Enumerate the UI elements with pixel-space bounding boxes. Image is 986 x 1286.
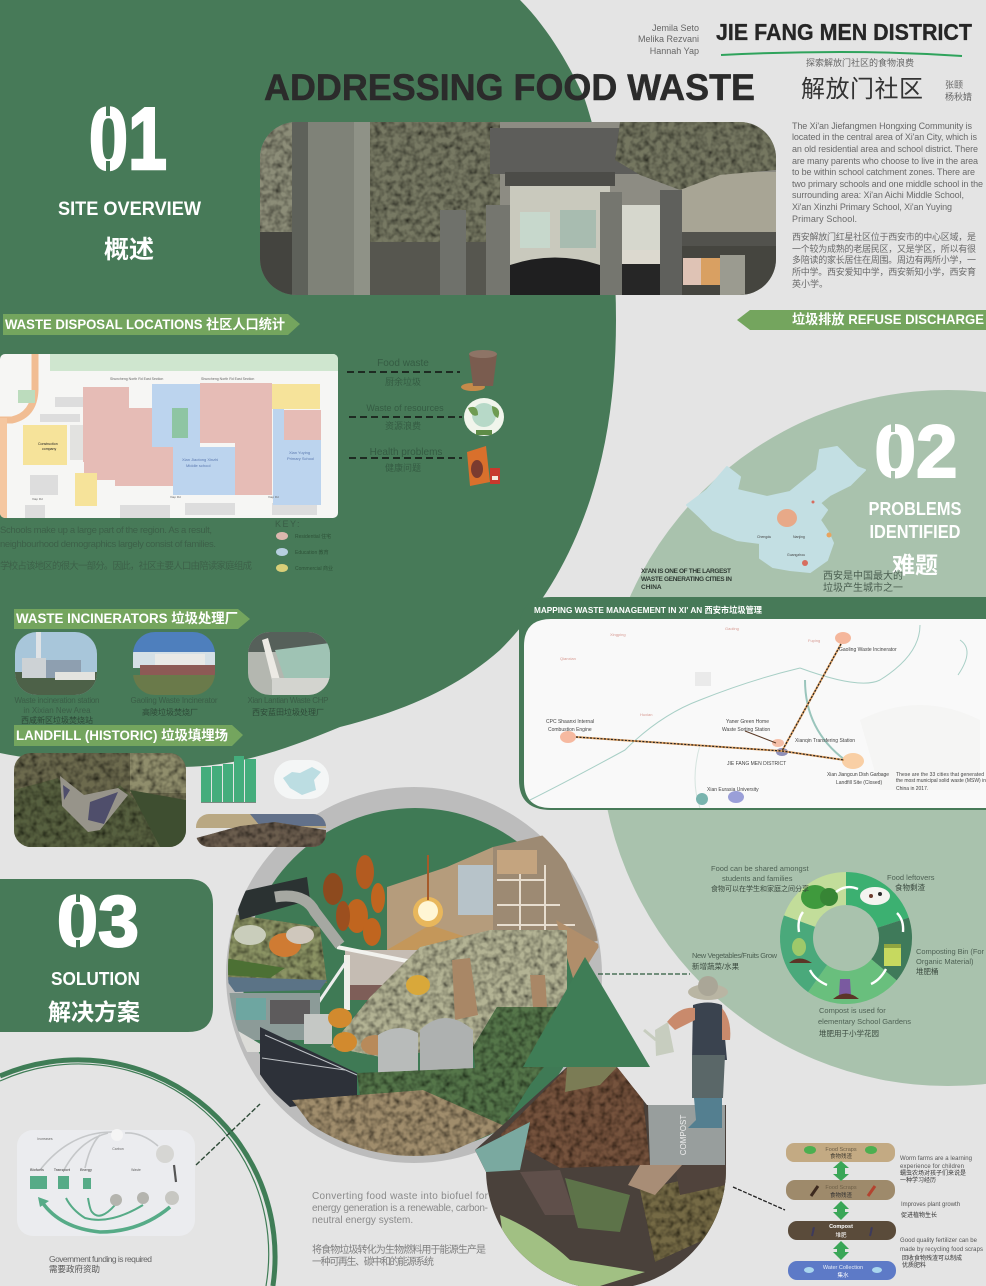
barrel: [628, 1105, 725, 1195]
panel: carbon cycle diagram: [17, 1129, 195, 1236]
map key: [275, 519, 333, 572]
section 02 heading: 02: [874, 410, 958, 493]
map: neighbourhood land use: Xiap Rd: [32, 497, 43, 501]
text: government funding: Government funding is required: [49, 1254, 152, 1264]
text: xi'an largest chinese: 西安是中国最大的: [823, 569, 903, 582]
bar: food scraps 1: Food Scraps: [825, 1147, 857, 1153]
chart: waste bars: [201, 756, 256, 803]
ring: bottom left: [0, 1060, 275, 1286]
triangle: [523, 957, 650, 1067]
text: biofuel english: [312, 1191, 489, 1226]
green underline: [721, 52, 962, 56]
map labels: Combustion Engine: [548, 727, 592, 733]
text: xi'an largest english: XI'AN IS ONE OF THE LARGEST: [641, 568, 731, 575]
banner: refuse discharge: 垃圾排放 REFUSE DISCHARGE: [792, 311, 984, 327]
machinery: [228, 993, 320, 1040]
plant building: [493, 836, 598, 942]
panel: carbon cycle diagram: Transport: [54, 1168, 71, 1172]
double arrows: [833, 1161, 849, 1260]
map: neighbourhood land use: Xian Jiaotong Xinzhi: [182, 457, 218, 462]
bright bulb: [413, 897, 443, 927]
map labels: These are the 33 cities that generated: [896, 772, 984, 778]
chinese district name: 解放门社区: [801, 76, 923, 103]
paragraph: chinese site description: 英小学。: [792, 278, 828, 289]
barrel: COMPOST: [679, 1115, 688, 1155]
pump nozzle: [235, 877, 310, 920]
main title: ADDRESSING FOOD WASTE: [264, 67, 755, 108]
cycle labels: 食物可以在学生和家庭之间分享: [711, 884, 809, 893]
authors: [638, 23, 699, 56]
worm farm notes: [900, 1156, 983, 1269]
food bowl: [224, 913, 327, 983]
map labels: Xian Jiangcun Dish Garbage: [827, 772, 889, 778]
city map: [524, 619, 986, 808]
label: health problems: [370, 447, 442, 473]
cycle icons: [801, 885, 829, 909]
city map: Gaoling: [725, 626, 739, 631]
panel: carbon cycle diagram: Biofuels: [30, 1168, 44, 1172]
paragraph: english site description: Primary School.: [792, 214, 857, 224]
captions: incinerators: Xian Lantian Waste CHP: [248, 696, 328, 705]
bar: compost: Compost: [829, 1224, 853, 1230]
map labels: Waste Sorting Station: [722, 727, 770, 733]
captions: incinerators: [14, 696, 328, 725]
banner: waste incinerators: WASTE INCINERATORS 垃圾处理厂: [16, 610, 238, 626]
worm farm notes: 蠕虫农场对孩子们来说是: [900, 1169, 966, 1177]
text: biofuel english: neutral energy system.: [312, 1215, 413, 1226]
text: xi'an largest chinese: 垃圾产生城市之一: [823, 581, 903, 594]
worm farm notes: experience for children: [900, 1164, 964, 1170]
worm farm notes: 优质肥料: [902, 1261, 926, 1269]
cycle labels: Food leftovers: [887, 873, 935, 882]
cycle diagram: [780, 872, 912, 1004]
worm farm notes: Improves plant growth: [901, 1202, 960, 1208]
map: neighbourhood land use: Xian Yuying: [289, 450, 310, 455]
label: food waste: 厨余垃圾: [385, 376, 421, 387]
bar: water collection: 集水: [837, 1271, 849, 1279]
map: neighbourhood land use: Construction: [38, 442, 58, 446]
map key: Residential 住宅: [295, 533, 331, 540]
chinese authors: 张颐: [945, 80, 963, 90]
paragraph: chinese site description: 一个较为成熟的老居民区，又是学区，所以有很: [792, 243, 976, 254]
collage: biofuel energy: [224, 833, 600, 1165]
text: xi'an largest chinese: [823, 569, 903, 594]
map: neighbourhood land use: Middle school: [186, 463, 211, 468]
china map: Nanjing: [793, 535, 805, 539]
grass: [357, 1007, 557, 1125]
panel: carbon cycle diagram: Increases: [37, 1137, 53, 1141]
text: xi'an largest english: CHINA: [641, 584, 662, 591]
bar: water collection: [788, 1261, 896, 1280]
label: health problems: Health problems: [370, 447, 442, 458]
paragraph: english site description: located in the central area of Xi'an City, which is: [792, 132, 978, 142]
panel: section 03: SOLUTION: [51, 969, 140, 989]
section 02 heading: IDENTIFIED: [870, 522, 960, 542]
panel: carbon cycle diagram: Waste: [131, 1168, 141, 1172]
bar: water collection: Water Collection: [823, 1265, 863, 1271]
map labels: Gaoling Waste Incinerator: [839, 647, 897, 653]
section 02 heading: PROBLEMS: [868, 499, 962, 519]
cycle labels: 堆肥桶: [916, 966, 938, 976]
cycle labels: Composting Bin (For: [916, 947, 984, 956]
silos: [387, 847, 493, 950]
small china map: [274, 760, 329, 799]
farmer: [644, 976, 730, 1128]
map: neighbourhood land use: Shuncheng North Rd East Section: [110, 377, 163, 381]
dashed connector: to cycle: [598, 973, 690, 975]
map key: KEY:: [275, 519, 301, 529]
photo: incinerator 3: [248, 632, 330, 695]
route lines: [576, 644, 844, 760]
map labels: Xian Eurasia University: [707, 787, 759, 793]
map labels: Yaner Green Home: [726, 719, 769, 725]
worm farm notes: 一种学习经历: [900, 1176, 936, 1184]
paragraph: english site description: are many parents who choose to live in the area: [792, 156, 978, 166]
worm farm notes: 回收食物残渣可以制成: [902, 1254, 962, 1262]
panel: section 03: 解决方案: [48, 999, 140, 1025]
map labels: Landfill Site (Closed): [836, 780, 882, 786]
green flow arrows: [42, 1198, 170, 1232]
city map: Fuping: [808, 638, 820, 643]
text: biofuel chinese: 将食物垃圾转化为生物燃料用于能源生产是: [312, 1243, 486, 1256]
background circle: light green section: [600, 390, 986, 1086]
banner: waste disposal locations: WASTE DISPOSAL LOCATIONS 社区人口统计: [5, 316, 285, 332]
photo: landfill pile: [196, 814, 326, 847]
cycle arrows: [798, 887, 903, 985]
paragraph: english site description: to be within school catchment zones. There are: [792, 167, 975, 177]
cycle labels: 食物剩渣: [895, 882, 925, 892]
paragraph: english site description: Xi'an Xinzhi Primary School, Xi'an Yuying: [792, 202, 952, 212]
photo: incinerator 2: [133, 632, 215, 695]
text: demographics english: Schools make up a large part of the region. As a result,: [0, 525, 212, 536]
paragraph: english site description: two primary schools and one middle school in the: [792, 179, 983, 189]
cycle labels: Food can be shared amongst: [711, 864, 809, 873]
paragraph: chinese site description: 西安解放门红星社区位于西安市的中心区域，是: [792, 231, 976, 242]
photo: school gate: [260, 122, 776, 295]
section 01 heading: [58, 89, 201, 264]
map labels: China in 2017.: [896, 786, 928, 792]
label: waste of resources: [366, 403, 444, 431]
cycle labels: Organic Material): [916, 957, 974, 966]
panel: carbon cycle diagram: Energy: [80, 1168, 92, 1172]
section 01 heading: 01: [89, 89, 167, 188]
worm farm flow: [786, 1143, 896, 1280]
label: waste of resources: Waste of resources: [366, 403, 444, 413]
cycle labels: 新增蔬菜/水果: [692, 961, 740, 971]
icon: globe sticker: [464, 398, 504, 436]
city map: Xingping: [610, 632, 626, 637]
green circle: [243, 808, 587, 1152]
bar: food scraps 2: [786, 1180, 895, 1200]
banner: landfill: [14, 725, 243, 746]
paragraph: english site description: an old residential area and school district. There: [792, 144, 978, 154]
district title: JIE FANG MEN DISTRICT: [716, 19, 972, 45]
dashed connector: to worm farm: [733, 1187, 785, 1210]
paragraph: english site description: surrounding area: Xi'an Aichi Middle School,: [792, 190, 964, 200]
watering can: [655, 1022, 674, 1056]
icon: junk food bag: [467, 446, 500, 486]
chinese authors: 杨秋婧: [945, 91, 972, 102]
label: food waste: [377, 358, 429, 387]
text: demographics english: [0, 525, 216, 550]
text: biofuel chinese: [312, 1243, 486, 1268]
cycle labels: New Vegetables/Fruits Grow: [692, 951, 778, 960]
label: food waste: Food waste: [377, 358, 429, 369]
captions: incinerators: 高陵垃圾焚烧厂: [142, 707, 198, 717]
sky window: [458, 865, 494, 915]
dashed leader lines to problems: [347, 372, 462, 458]
captions: incinerators: 西安蓝田垃圾处理厂: [252, 707, 324, 717]
captions: incinerators: in Xixian New Area: [23, 706, 91, 715]
map key: Commercial 商业: [295, 565, 333, 572]
authors: Jemila Seto: [652, 23, 699, 33]
section 01 heading: 概述: [104, 236, 154, 264]
bar: food scraps 2: Food Scraps: [825, 1185, 857, 1191]
panel: section 03: [0, 879, 213, 1032]
bar: food scraps 2: 食物残渣: [830, 1191, 852, 1199]
section 03 heading: 03: [57, 882, 139, 962]
bar: compost: 堆肥: [835, 1231, 847, 1239]
bulbs: [323, 855, 385, 946]
map labels: [546, 647, 986, 793]
dashed connector: to energy diagram: [196, 1104, 260, 1165]
captions: incinerators: Gaoling Waste Incinerator: [130, 696, 218, 705]
cycle labels: [692, 864, 984, 1038]
cycle labels: students and families: [722, 874, 793, 883]
text: government funding: 需要政府资助: [49, 1264, 100, 1274]
city map: Huxian: [640, 712, 652, 717]
map: neighbourhood land use: company: [42, 447, 56, 451]
map: neighbourhood land use: Shuncheng North Rd East Section: [201, 377, 254, 381]
text: biofuel english: energy generation is a renewable, carbon-: [312, 1203, 488, 1214]
photo: landfill satellite: [14, 753, 186, 847]
captions: incinerators: 西咸新区垃圾焚烧站: [21, 715, 93, 725]
icon: trash bin: [461, 350, 497, 391]
panel: carbon cycle diagram: Carbon: [112, 1147, 124, 1151]
city map: Qianxian: [560, 656, 576, 661]
authors: Melika Rezvani: [638, 34, 699, 44]
section 02 heading: [868, 410, 962, 578]
text: government funding: [49, 1254, 152, 1274]
text: biofuel english: Converting food waste into biofuel for: [312, 1191, 489, 1202]
cycle labels: Compost is used for: [819, 1006, 886, 1015]
map: neighbourhood land use: Primary School: [287, 456, 314, 461]
text: xi'an largest english: [641, 568, 732, 591]
solar panels: [260, 1027, 357, 1107]
map labels: CPC Shaanxi Internal: [546, 719, 594, 725]
wood pellets: [292, 1090, 502, 1156]
map labels: Xianqin Transfering Station: [795, 738, 855, 744]
worm farm notes: Worm farms are a learning: [900, 1156, 972, 1162]
map key: Education 教育: [295, 549, 329, 556]
text: xi'an largest english: WASTE GENERATING CITIES IN: [641, 576, 732, 583]
banner: waste disposal locations: [3, 314, 300, 335]
banner: refuse discharge: [737, 310, 986, 330]
gray ring: [226, 787, 602, 1163]
label: health problems: 健康问题: [385, 462, 421, 473]
chinese authors: [945, 80, 972, 102]
text: demographics chinese: 学校占该地区的很大一部分。因此，社区主要人口由陪读家庭组成: [0, 560, 252, 572]
bar: food scraps 1: 食物残渣: [830, 1152, 852, 1160]
china map: Chengdu: [757, 535, 771, 539]
photo: incinerator 1: [15, 632, 97, 695]
paragraph: chinese site description: 所中学。西安爱知中学，西安新知小学，西安育: [792, 266, 976, 277]
text: biofuel chinese: 一种可再生、碳中和的能源系统: [312, 1255, 434, 1268]
bar: food scraps 1: [786, 1143, 895, 1162]
cycle labels: 堆肥用于小学花园: [819, 1028, 879, 1038]
background circle: dark green section: [0, 0, 616, 767]
paragraph: english site description: The Xi'an Jiefangmen Hongxing Community is: [792, 121, 972, 131]
label: waste of resources: 资源浪费: [385, 420, 421, 431]
bar: compost: [788, 1221, 896, 1240]
map: neighbourhood land use: [0, 354, 338, 518]
section 01 heading: SITE OVERVIEW: [58, 199, 201, 220]
sand pile: [387, 926, 464, 950]
china map: [687, 447, 865, 572]
cycle labels: elementary School Gardens: [818, 1017, 911, 1026]
worm farm notes: made by recycling food scraps: [900, 1247, 983, 1253]
metal silos: [378, 1028, 418, 1075]
banner: landfill: LANDFILL (HISTORIC) 垃圾填埋场: [16, 727, 228, 743]
worm farm notes: 促进植物生长: [901, 1211, 937, 1219]
worm farm notes: Good quality fertilizer can be: [900, 1238, 978, 1244]
map labels: JIE FANG MEN DISTRICT: [727, 761, 786, 767]
captions: incinerators: Waste incineration station: [14, 696, 100, 705]
panel: xi'an map: [519, 597, 986, 810]
section 02 heading: 难题: [892, 552, 938, 578]
map labels: the most municipal solid waste (MSW) in: [896, 778, 986, 784]
paragraph: english site description: [792, 121, 983, 224]
map: neighbourhood land use: Xiap Rd: [268, 495, 279, 499]
authors: Hannah Yap: [650, 46, 699, 56]
map: neighbourhood land use: Xiap Rd: [170, 495, 181, 499]
china map: Guangzhou: [787, 553, 805, 557]
chinese subtitle: 探索解放门社区的食物浪费: [806, 57, 914, 68]
truck and turbine: [345, 950, 417, 985]
paragraph: chinese site description: 多陪读的家长居住在周围。周边有两所小学，一: [792, 254, 976, 265]
panel heading: MAPPING WASTE MANAGEMENT IN XI' AN 西安市垃圾管理: [534, 605, 762, 615]
text: demographics english: neighbourhood demographics largely consist of families.: [0, 539, 216, 550]
compost photo: [475, 1060, 727, 1286]
paragraph: chinese site description: [792, 231, 976, 289]
food waste pile: [330, 930, 567, 1057]
